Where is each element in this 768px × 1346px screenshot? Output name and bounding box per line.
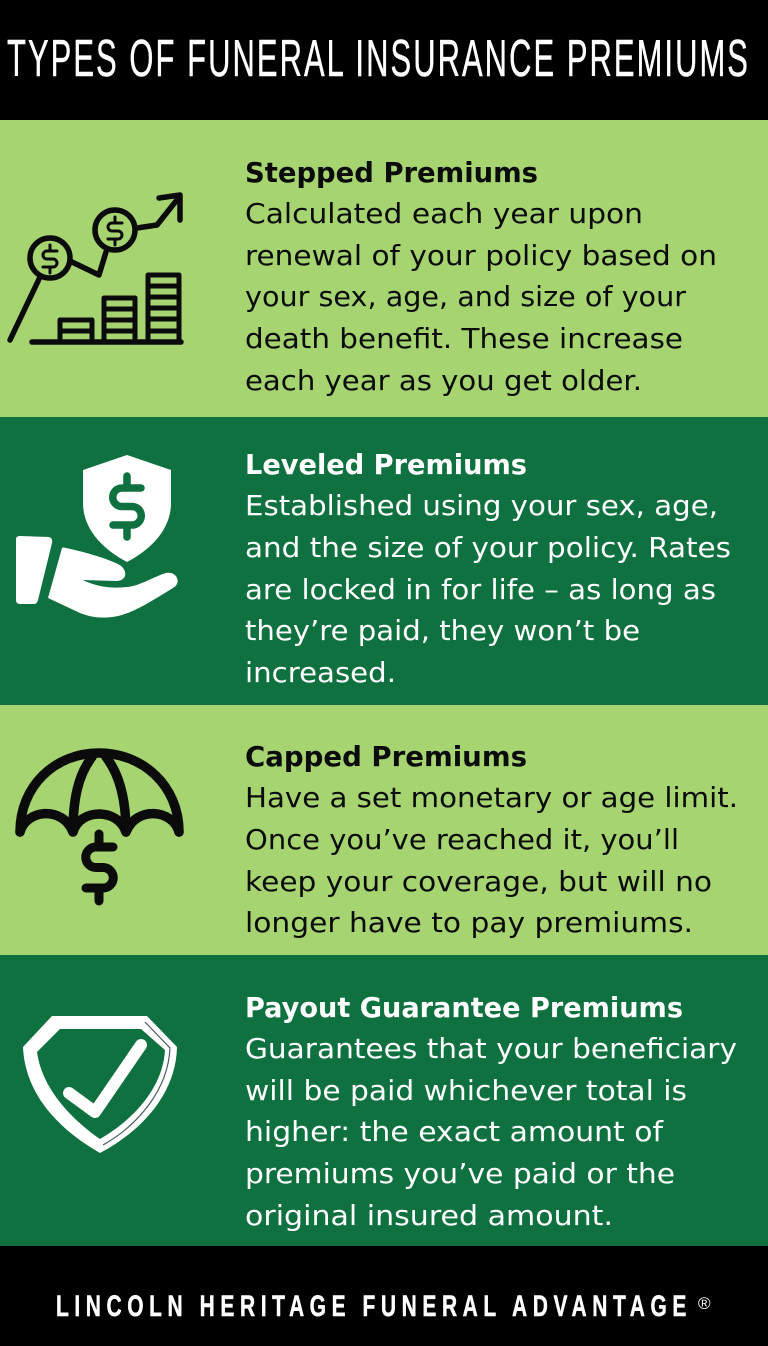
text: leveled premiums: Leveled Premiums [245, 448, 527, 481]
icon: umbrella with dollar [20, 753, 179, 901]
text: stepped premiums [245, 156, 717, 397]
text: leveled premiums: and the size of your policy. Rates [245, 532, 731, 564]
text: payout guarantee premiums: original insured amount. [245, 1200, 613, 1232]
text: capped premiums: Capped Premiums [245, 740, 527, 773]
text: payout guarantee premiums: will be paid whichever total is [245, 1075, 687, 1107]
text: capped premiums: keep your coverage, but will no [245, 866, 712, 898]
text: capped premiums: longer have to pay premiums. [245, 907, 693, 939]
text: payout guarantee premiums [245, 991, 737, 1232]
text: stepped premiums: your sex, age, and size of your [245, 281, 687, 313]
registered mark: ® [698, 1294, 711, 1313]
text: stepped premiums: Calculated each year upon [245, 198, 643, 230]
text: leveled premiums: Established using your sex, age, [245, 490, 718, 522]
panel: payout guarantee premiums [0, 955, 768, 1246]
text: stepped premiums: death benefit. These increase [245, 323, 683, 355]
icon: hand holding shield [16, 455, 178, 618]
text: payout guarantee premiums: premiums you’ve paid or the [245, 1158, 675, 1190]
panel: stepped premiums [0, 120, 768, 417]
text: stepped premiums: Stepped Premiums [245, 156, 538, 189]
icon: rising chart with coins [10, 195, 181, 342]
text: stepped premiums: each year as you get older. [245, 365, 642, 397]
title banner [0, 0, 768, 120]
text: leveled premiums: increased. [245, 657, 396, 689]
text: payout guarantee premiums: Payout Guarantee Premiums [245, 991, 683, 1024]
panel: capped premiums [0, 705, 768, 955]
footer banner [0, 1246, 768, 1346]
text: capped premiums: Have a set monetary or age limit. [245, 782, 738, 814]
panel: leveled premiums [0, 417, 768, 705]
text: leveled premiums: are locked in for life – as long as [245, 574, 716, 606]
icon: shield with check mark [23, 1016, 177, 1153]
text: capped premiums [245, 740, 738, 939]
text: capped premiums: Once you’ve reached it, you’ll [245, 824, 679, 856]
text: payout guarantee premiums: Guarantees that your beneficiary [245, 1033, 737, 1065]
text: stepped premiums: renewal of your policy based on [245, 240, 717, 272]
text: leveled premiums [245, 448, 731, 689]
text: leveled premiums: they’re paid, they won’t be [245, 615, 640, 647]
text: payout guarantee premiums: higher: the exact amount of [245, 1116, 664, 1148]
